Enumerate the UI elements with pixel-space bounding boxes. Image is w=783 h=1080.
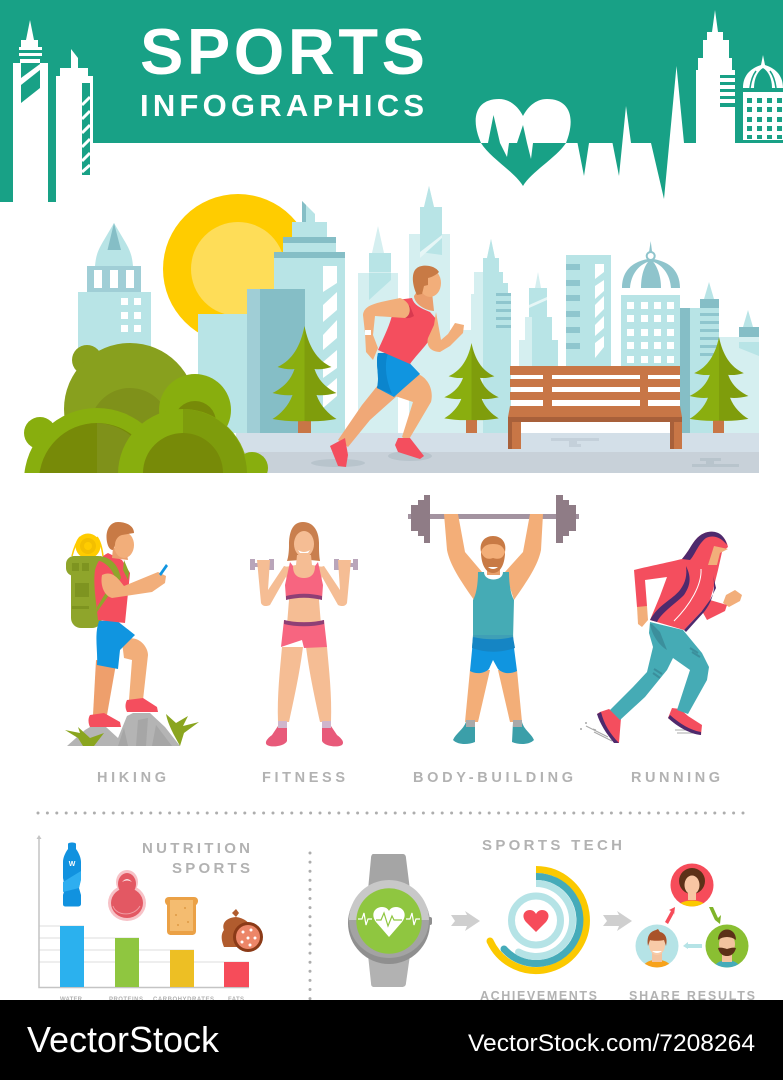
arm: [101, 572, 166, 598]
city park scene: [24, 186, 759, 473]
avatar: bearded man: [706, 924, 748, 970]
background light skyline: [409, 186, 759, 433]
icon: water bottle: W: [69, 861, 76, 868]
achievements rings: [486, 870, 586, 970]
bushes: [24, 343, 268, 473]
shoes: [453, 722, 475, 744]
trousers: [610, 622, 709, 720]
icon: smartwatch: [348, 854, 432, 987]
tree middle: [444, 343, 499, 433]
shorts: [281, 620, 327, 648]
phone: [159, 564, 168, 576]
body-building figure: [408, 495, 579, 744]
label: fitness: FITNESS: [262, 770, 345, 786]
label: achievements: ACHIEVEMENTS: [480, 989, 597, 1003]
icon: heart with pulse: [476, 99, 571, 159]
icon: meat: [108, 870, 146, 921]
backpack: [72, 537, 103, 556]
footer bar: [0, 1000, 783, 1080]
icon: right skyline: [696, 10, 783, 143]
icon: sausage: [222, 909, 263, 952]
label: running: RUNNING: [631, 770, 720, 786]
neck and torso: [285, 555, 323, 625]
label: body-building: BODY-BUILDING: [413, 770, 573, 786]
ground: [236, 433, 759, 473]
axis labels: [60, 997, 244, 1003]
legs: [93, 660, 116, 715]
arrow: red: [665, 907, 675, 924]
barbell: [408, 514, 579, 519]
subtitle: INFOGRAPHICS: [140, 88, 424, 123]
tree left: [272, 326, 336, 433]
arrow: [603, 911, 632, 931]
hiking figure: [65, 522, 199, 746]
icon: water bottle: [63, 842, 81, 906]
shorts: [470, 640, 517, 673]
runner: [311, 266, 464, 467]
axis labels: PROTEINS: [109, 997, 143, 1003]
heading: NUTRITION: [142, 840, 250, 857]
title: SPORTS: [140, 15, 425, 88]
arrow: blue: [683, 942, 702, 949]
axis labels: CARBOHYDRATES: [153, 997, 214, 1003]
shoes: [88, 713, 121, 727]
legs: [278, 647, 303, 722]
legs: [465, 670, 490, 722]
grass: [65, 727, 104, 746]
arrow: green: [709, 907, 721, 924]
panel: nutrition sports: [36, 835, 263, 1003]
panel: sports tech: [348, 837, 755, 1003]
dumbbells: [250, 559, 358, 570]
shirt: [94, 553, 130, 623]
avatar: young man: [636, 924, 678, 968]
running figure: [580, 532, 742, 743]
axis labels: FATS: [228, 997, 244, 1003]
image id: VectorStock.com/7208264: [468, 1030, 755, 1057]
fitness figure: [250, 522, 358, 746]
hair: [287, 522, 320, 561]
bench: [508, 366, 682, 449]
arms: [257, 560, 291, 606]
icon: bread: [165, 897, 198, 935]
avatar: woman: [670, 864, 714, 908]
sun: [163, 194, 296, 332]
front shoe: [668, 708, 702, 735]
header banner: [0, 0, 783, 202]
arms: [444, 514, 482, 600]
bar chart: [36, 835, 249, 988]
tree right: [690, 337, 748, 433]
central towers: [198, 201, 398, 433]
heading: SPORTS TECH: [482, 837, 622, 854]
axis labels: WATER: [60, 997, 83, 1003]
label: share results: SHARE RESULTS: [629, 989, 755, 1003]
speed lines: [586, 726, 612, 741]
hood and jacket: [634, 532, 728, 630]
rocks: [67, 713, 180, 746]
heading line two: SPORTS: [172, 860, 250, 877]
hands: [637, 606, 648, 627]
tank top: [473, 572, 514, 640]
label: hiking: HIKING: [97, 770, 166, 786]
top: [285, 562, 323, 599]
arrow: [451, 911, 480, 931]
left domed building: [78, 223, 151, 362]
back shoe: [597, 709, 621, 743]
brand wordmark: VectorStock: [27, 1019, 220, 1060]
head: [112, 548, 128, 560]
icon: left skyline: [13, 20, 93, 202]
shoes: [266, 726, 287, 746]
shorts: [96, 620, 135, 669]
head: [487, 560, 500, 575]
